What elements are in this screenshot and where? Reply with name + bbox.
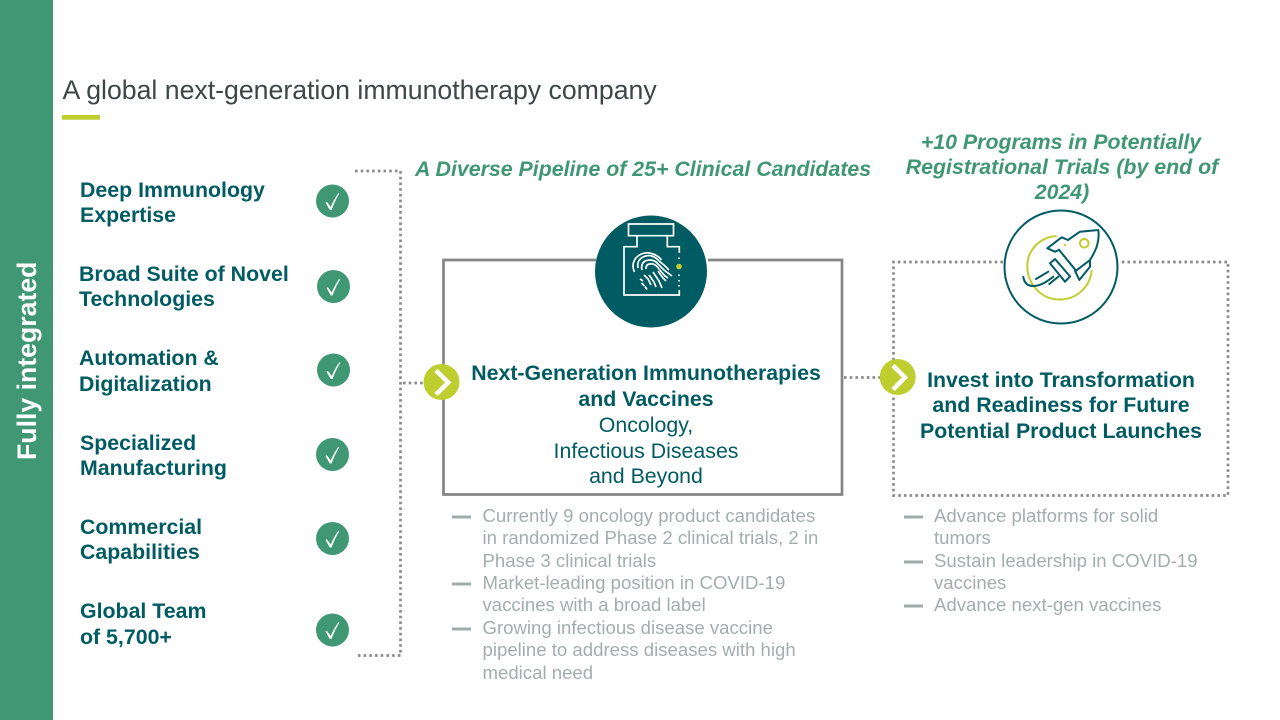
capability list bbox=[79, 178, 350, 649]
bullet 1: Advance platforms for solid bbox=[934, 505, 1158, 526]
arrow: into right box bbox=[880, 359, 916, 395]
capability: team bbox=[80, 599, 349, 649]
right box text: and Readiness for Future bbox=[932, 393, 1190, 417]
capability: commercial: Capabilities bbox=[80, 540, 200, 564]
bullet 3: medical need bbox=[482, 662, 593, 683]
registrational trials heading: Registrational Trials (by end of bbox=[906, 155, 1220, 179]
left sidebar bbox=[0, 0, 53, 720]
right box text: Potential Product Launches bbox=[920, 419, 1202, 443]
bullet 1: in randomized Phase 2 clinical trials, 2 in bbox=[482, 527, 818, 548]
capability: technologies bbox=[79, 262, 350, 311]
capability: team: of 5,700+ bbox=[80, 625, 172, 649]
bullet 2: vaccines with a broad label bbox=[482, 594, 706, 615]
capability: team: Global Team bbox=[80, 599, 206, 623]
bullet 3: Advance next-gen vaccines bbox=[934, 594, 1161, 615]
capability: manufacturing: Manufacturing bbox=[80, 456, 227, 480]
title: A global next-generation immunotherapy company bbox=[62, 75, 657, 105]
center box text bbox=[471, 361, 821, 488]
capability: commercial: Commercial bbox=[80, 515, 202, 539]
bullet 2: Sustain leadership in COVID-19 bbox=[934, 550, 1198, 571]
bullet 1: Currently 9 oncology product candidates bbox=[482, 505, 815, 526]
icon: fingerprint vial bbox=[595, 216, 707, 328]
registrational trials heading: +10 Programs in Potentially bbox=[921, 130, 1202, 154]
center box text: Next-Generation Immunotherapies bbox=[471, 361, 821, 385]
capability: manufacturing: Specialized bbox=[80, 431, 196, 455]
right box text: Invest into Transformation bbox=[927, 368, 1195, 392]
title accent bar bbox=[62, 115, 100, 120]
bullet 3 bbox=[452, 617, 796, 683]
pipeline heading: A Diverse Pipeline of 25+ Clinical Candidates bbox=[414, 157, 871, 181]
capability: commercial bbox=[80, 515, 349, 564]
bullet 2 bbox=[904, 550, 1198, 593]
right dotted box bbox=[894, 262, 1228, 496]
bullet 2 bbox=[452, 572, 785, 615]
arrow: into center box bbox=[424, 364, 460, 400]
bullet 3: Growing infectious disease vaccine bbox=[482, 617, 773, 638]
bullet 1 bbox=[452, 505, 818, 571]
bullet 1 bbox=[904, 505, 1158, 548]
capability: automation bbox=[79, 346, 350, 396]
bullet 2: vaccines bbox=[934, 572, 1006, 593]
registrational trials heading bbox=[906, 130, 1220, 204]
capability: automation: Digitalization bbox=[79, 372, 212, 396]
capability: manufacturing bbox=[80, 431, 349, 480]
registrational trials heading: 2024) bbox=[1034, 180, 1089, 204]
right box text bbox=[920, 368, 1202, 443]
bullet 1: tumors bbox=[934, 527, 991, 548]
dotted bracket connector bbox=[355, 171, 424, 656]
capability: technologies: Broad Suite of Novel bbox=[79, 262, 289, 286]
center box text: Infectious Diseases bbox=[554, 439, 738, 463]
capability: immunology bbox=[80, 178, 349, 227]
icon: rocket bbox=[1004, 210, 1118, 324]
center box bbox=[444, 260, 842, 494]
capability: immunology: Deep Immunology bbox=[80, 178, 265, 202]
bullet 1: Phase 3 clinical trials bbox=[482, 550, 656, 571]
capability: technologies: Technologies bbox=[79, 287, 215, 311]
center bullet list bbox=[452, 505, 818, 683]
capability: automation: Automation & bbox=[79, 346, 219, 370]
right bullet list bbox=[904, 505, 1198, 615]
capability: immunology: Expertise bbox=[80, 203, 176, 227]
title bbox=[62, 75, 657, 120]
bullet 2: Market-leading position in COVID-19 bbox=[482, 572, 785, 593]
center box text: and Beyond bbox=[589, 464, 703, 488]
bullet 3: pipeline to address diseases with high bbox=[482, 639, 796, 660]
center box text: and Vaccines bbox=[578, 387, 714, 411]
sidebar label: Fully integrated bbox=[12, 262, 42, 460]
dotted connector to right box bbox=[844, 376, 882, 379]
center box text: Oncology, bbox=[599, 413, 693, 437]
